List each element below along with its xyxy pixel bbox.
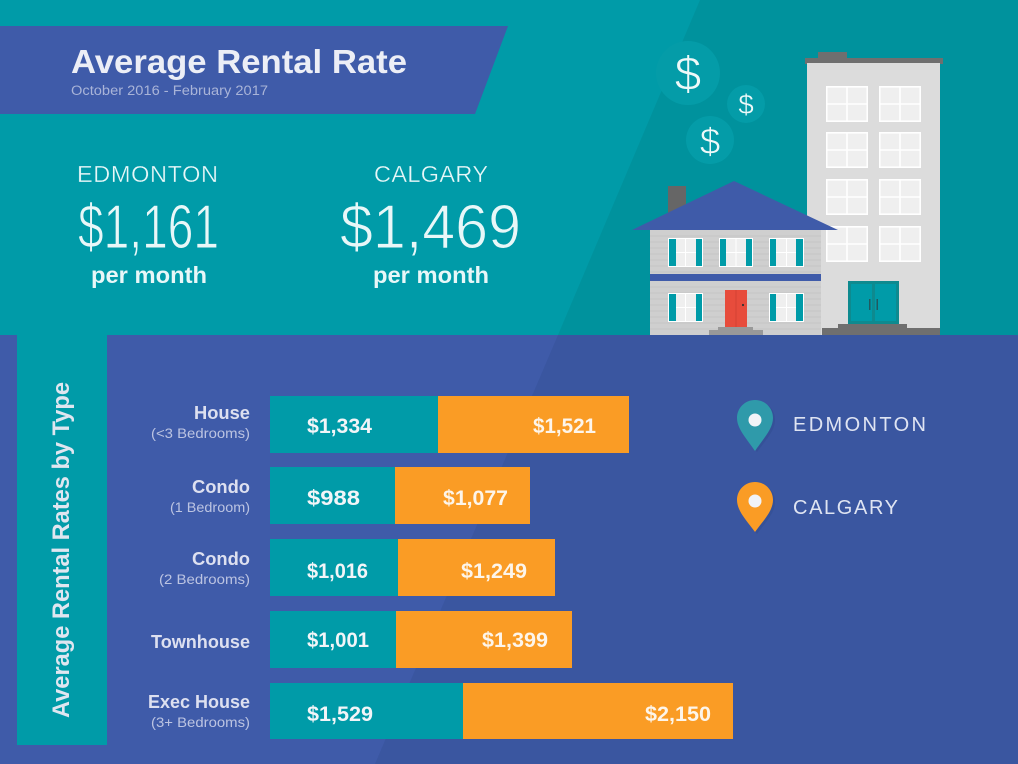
Edmonton average rent: EDMONTON	[77, 161, 218, 187]
Edmonton average rent: $1,161	[78, 193, 219, 262]
row: exec house: $2,150	[645, 703, 711, 726]
row: condo 1 bedroom: (1 Bedroom)	[170, 500, 250, 515]
icon: house	[632, 181, 838, 335]
row: house: $1,521	[533, 415, 596, 438]
title banner	[0, 26, 508, 114]
bar chart: rental rates by type	[148, 396, 733, 739]
row: townhouse	[151, 611, 572, 668]
icon: apartment building	[805, 52, 943, 335]
row: townhouse: $1,001	[307, 629, 369, 652]
icon: Calgary pin	[737, 482, 775, 534]
row: condo 2 bedrooms: $1,016	[307, 560, 368, 583]
Edmonton average rent	[77, 161, 219, 288]
legend label: Edmonton: EDMONTON	[793, 414, 926, 436]
row: house: House	[194, 403, 250, 423]
row: exec house: $1,529	[307, 703, 373, 726]
row: house	[151, 396, 629, 453]
row: townhouse: Townhouse	[151, 632, 250, 652]
row: exec house	[148, 683, 733, 739]
Calgary average rent: $1,469	[340, 193, 521, 262]
icon: floating dollar signs: $	[738, 89, 754, 120]
icon: floating dollar signs: $	[675, 48, 701, 101]
row: house: (<3 Bedrooms)	[151, 426, 250, 441]
panel: section side label	[17, 335, 107, 745]
row: condo 2 bedrooms	[159, 539, 555, 596]
row: townhouse: $1,399	[482, 629, 548, 652]
legend	[737, 400, 926, 534]
row: condo 1 bedroom: $988	[307, 487, 360, 510]
row: condo 2 bedrooms: $1,249	[461, 560, 527, 583]
icon: floating dollar signs	[656, 41, 765, 164]
title: Average Rental Rate	[71, 43, 407, 80]
icon: Edmonton pin	[737, 400, 775, 452]
panel: section side label: Average Rental Rates by Type	[48, 382, 75, 718]
row: condo 2 bedrooms: Condo	[192, 549, 250, 569]
Calgary average rent: per month	[373, 262, 489, 288]
row: house: $1,334	[307, 415, 372, 438]
row: condo 1 bedroom	[170, 467, 530, 524]
icon: floating dollar signs: $	[700, 121, 720, 162]
row: condo 2 bedrooms: (2 Bedrooms)	[159, 572, 250, 587]
row: condo 1 bedroom: $1,077	[443, 487, 508, 510]
legend label: Calgary: CALGARY	[793, 497, 898, 519]
Calgary average rent: CALGARY	[374, 161, 488, 187]
Edmonton average rent: per month	[91, 262, 207, 288]
row: condo 1 bedroom: Condo	[192, 477, 250, 497]
Calgary average rent	[340, 161, 521, 288]
row: exec house: (3+ Bedrooms)	[151, 715, 250, 730]
row: exec house: Exec House	[148, 692, 250, 712]
date range: October 2016 - February 2017	[71, 83, 268, 98]
